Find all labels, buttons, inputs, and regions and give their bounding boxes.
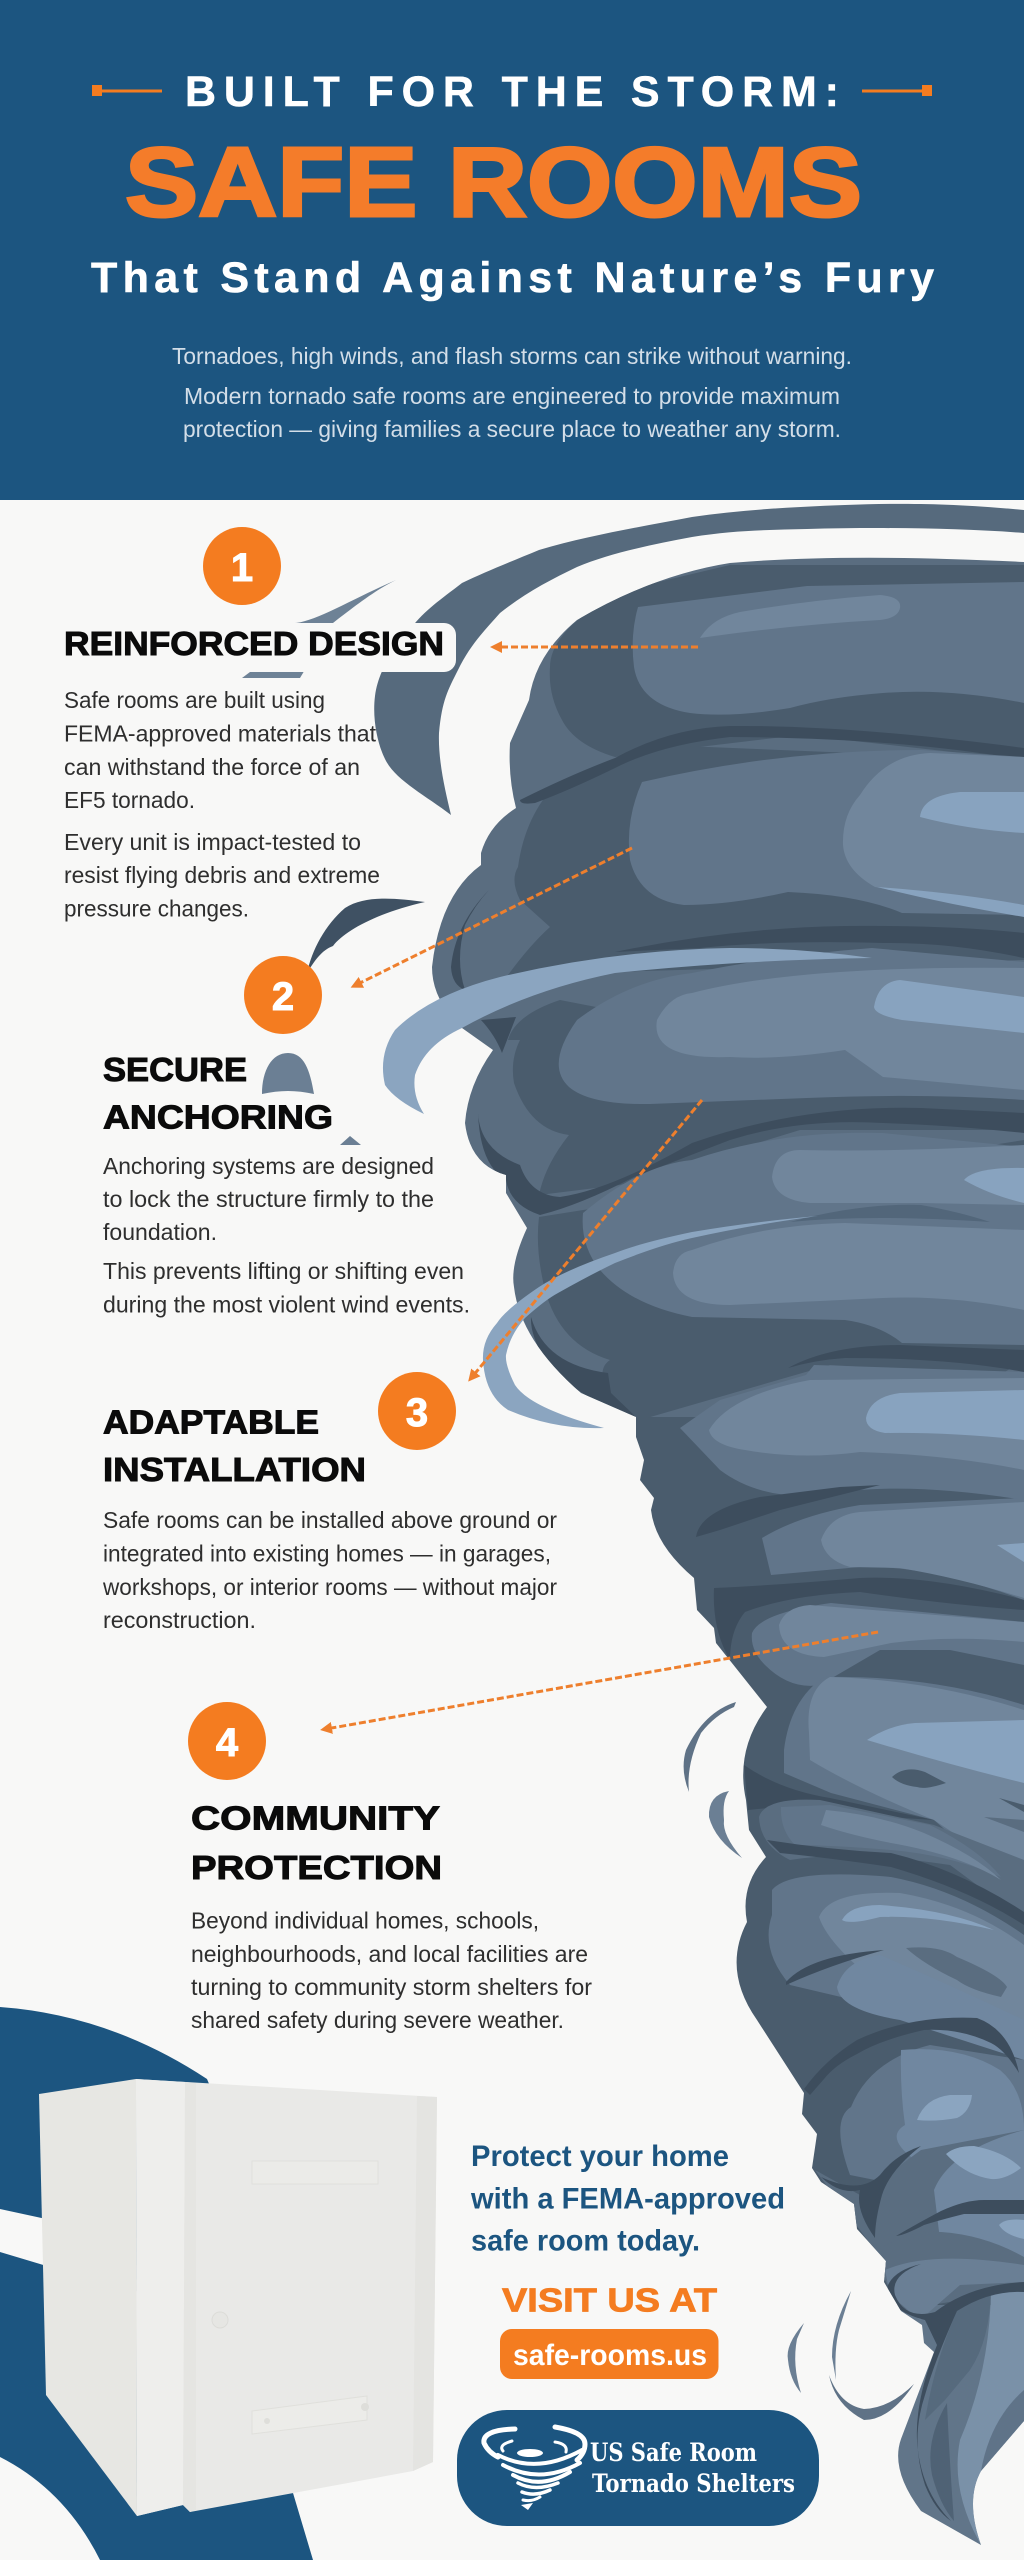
body 2: to lock the structure firmly to the (103, 1186, 434, 1212)
door bolt (212, 2312, 228, 2328)
body 4: shared safety during severe weather. (191, 2007, 564, 2033)
body 1: FEMA-approved materials that (64, 720, 377, 746)
heading 4: COMMUNITY (191, 1800, 440, 1836)
sliver near tail left (788, 2323, 804, 2393)
swirl: teardrop (262, 1053, 314, 1094)
body 2: foundation. (103, 1219, 217, 1245)
body 2: during the most violent wind events. (103, 1292, 470, 1318)
panel: header (0, 0, 1024, 500)
left title ornament (92, 85, 162, 96)
lower panel (252, 2396, 367, 2434)
body 3 (102, 1507, 557, 1633)
heading 2 (103, 1051, 333, 1136)
body 3: Safe rooms can be installed above ground or (103, 1507, 557, 1533)
body 2: This prevents lifting or shifting even (103, 1258, 464, 1284)
arrow: to step 1 (496, 646, 698, 648)
badge 2 (244, 956, 322, 1034)
panel: step 3 adaptable installation (102, 1372, 557, 1633)
call to action text: with a FEMA-approved (470, 2182, 785, 2216)
body 1: Safe rooms are built using (64, 687, 325, 713)
body 1: can withstand the force of an (64, 754, 360, 780)
heading 2: ANCHORING (103, 1098, 333, 1136)
blue arc behind safe room (0, 2007, 313, 2560)
logo text (590, 2438, 795, 2498)
badge 1: 1 (231, 546, 253, 590)
call to action text: Protect your home (471, 2140, 729, 2173)
band 8 (759, 1800, 1024, 1920)
band 1 (550, 565, 1024, 760)
url button: safe-rooms.us (513, 2339, 707, 2372)
heading label background (58, 623, 456, 672)
arrow: to step 3 (472, 1100, 702, 1377)
title main: SAFE ROOMS (125, 127, 862, 237)
badge 4 (188, 1702, 266, 1780)
side face (39, 2079, 137, 2516)
swirl: dark sliver (307, 899, 425, 973)
body 3: integrated into existing homes — in garages, (103, 1540, 551, 1566)
crescent near tail (829, 2375, 914, 2420)
intro text (172, 343, 852, 442)
body 1: EF5 tornado. (64, 787, 195, 813)
panel: step 2 secure anchoring (103, 956, 470, 1318)
heading 3: INSTALLATION (103, 1451, 366, 1488)
tornado illustration (242, 504, 1024, 2560)
upper panel (252, 2161, 378, 2184)
band 10 (840, 2045, 1024, 2180)
call to action text (470, 2140, 785, 2258)
heading 2: SECURE (103, 1051, 247, 1088)
call to action text: safe room today. (471, 2224, 700, 2258)
icon: tornado (484, 2427, 585, 2510)
panel: step 4 community protection (188, 1702, 592, 2033)
band 2 (508, 745, 1024, 975)
intro text: Tornadoes, high winds, and flash storms can strike without warning. (172, 343, 852, 369)
swirl: small triangle (340, 1136, 361, 1145)
title line 1: BUILT FOR THE STORM: (185, 68, 839, 116)
door seam (183, 2082, 196, 2512)
right title ornament (862, 85, 932, 96)
body 4: turning to community storm shelters for (191, 1974, 592, 2000)
heading 3 (103, 1404, 366, 1488)
sliver near tail middle (832, 2291, 851, 2380)
band 3 (508, 1000, 1024, 1195)
arrow: to step 2 (356, 848, 632, 985)
badge 4: 4 (216, 1721, 239, 1765)
tornado body (420, 540, 1024, 2560)
band 9 (768, 1874, 1024, 1997)
intro text: protection — giving families a secure place to weather any storm. (183, 416, 841, 442)
wind swirl 2 (483, 1216, 818, 1428)
swirl: top band (374, 504, 1024, 815)
band 5 (680, 1365, 1024, 1500)
badge 3: 3 (406, 1391, 428, 1435)
body 2: Anchoring systems are designed (103, 1153, 434, 1179)
panel: step 1 reinforced design (58, 527, 456, 922)
band 4 (538, 1140, 1024, 1420)
body 4 (191, 1908, 592, 2033)
heading 4: PROTECTION (191, 1849, 442, 1886)
band 6 (762, 1498, 1024, 1600)
panel bolts (264, 2403, 369, 2424)
sliver near step 4 (684, 1702, 736, 1792)
body 1 (64, 687, 380, 922)
safe room unit (39, 2079, 437, 2516)
band 7 (784, 1677, 1024, 1832)
visit us at: VISIT US AT (502, 2282, 717, 2318)
sliver near step 4 lower (709, 1791, 742, 1858)
swirl: small crescent (242, 580, 396, 678)
heading 4 (191, 1800, 442, 1886)
right strip (413, 2096, 437, 2471)
badge 1 (203, 527, 281, 605)
dark wedge under swirl (481, 1017, 516, 1053)
body 2 (103, 1153, 470, 1318)
body 4: neighbourhoods, and local facilities are (191, 1941, 588, 1967)
front face (136, 2079, 437, 2516)
logo text: US Safe Room (590, 2438, 757, 2467)
body 3: reconstruction. (103, 1607, 256, 1633)
logo badge (457, 2410, 819, 2526)
badge 3 (378, 1372, 456, 1450)
badge 2: 2 (272, 975, 294, 1019)
title line 3: That Stand Against Nature’s Fury (91, 254, 934, 302)
intro text: Modern tornado safe rooms are engineered to provide maximum (184, 383, 840, 409)
arrow: to step 4 (326, 1632, 878, 1729)
logo text: Tornado Shelters (592, 2469, 795, 2498)
body 1: resist flying debris and extreme (64, 862, 380, 888)
corner strip (136, 2079, 185, 2516)
wind swirl 1 (383, 948, 872, 1114)
body 4: Beyond individual homes, schools, (191, 1908, 539, 1934)
url button (500, 2329, 718, 2379)
heading 3: ADAPTABLE (103, 1404, 319, 1440)
body 1: pressure changes. (64, 896, 249, 922)
tail (925, 2289, 991, 2420)
heading 1: REINFORCED DESIGN (64, 625, 444, 662)
body 1: Every unit is impact-tested to (64, 829, 361, 855)
body 3: workshops, or interior rooms — without major (102, 1574, 557, 1600)
